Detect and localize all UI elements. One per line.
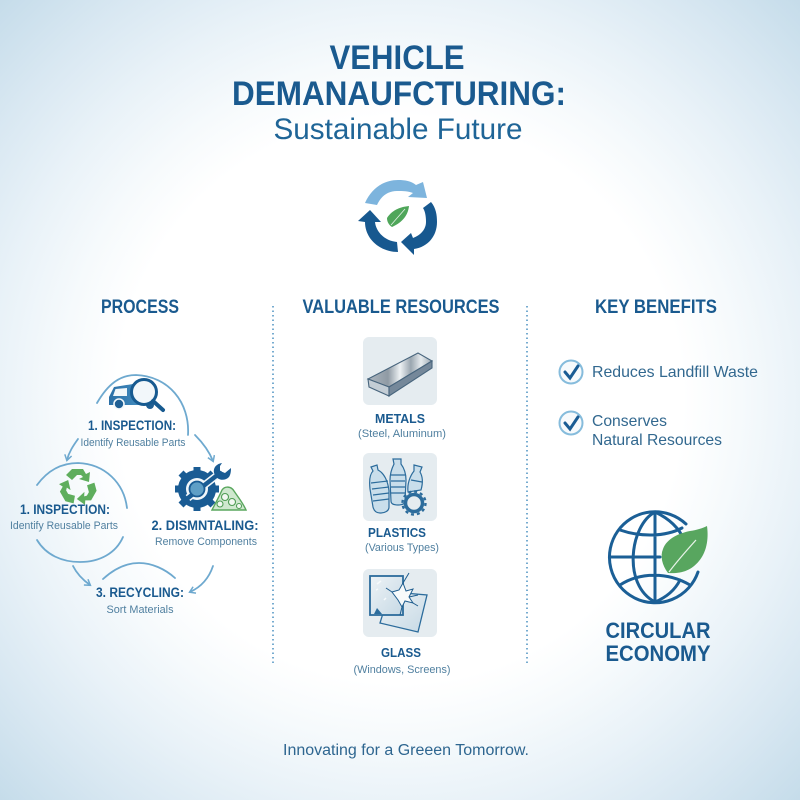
label: circular economy bbox=[606, 618, 710, 666]
label: glass: GLASS bbox=[381, 646, 421, 660]
icon: globe with leaf bbox=[609, 512, 708, 603]
cycle arcs and arrows bbox=[37, 375, 213, 592]
label: metals bbox=[358, 412, 446, 440]
benefit: conserves natural resources: Natural Resources bbox=[592, 432, 722, 449]
panel: key benefits bbox=[560, 360, 758, 666]
step label: dismantling: Remove Components bbox=[155, 536, 257, 548]
panel: valuable resources bbox=[354, 337, 450, 676]
step label: inspection top: Identify Reusable Parts bbox=[80, 437, 186, 449]
footer tagline: Innovating for a Greeen Tomorrow. bbox=[283, 742, 529, 759]
icon: vehicle with magnifier bbox=[109, 380, 163, 410]
label: glass bbox=[354, 646, 450, 676]
label: metals: (Steel, Aluminum) bbox=[358, 428, 446, 440]
icon: metal bar bbox=[363, 337, 437, 405]
icon: recycle symbol bbox=[56, 469, 100, 506]
step label: recycling: 3. RECYCLING: bbox=[96, 585, 184, 600]
heading: process: PROCESS bbox=[101, 297, 179, 318]
step label: inspection top: 1. INSPECTION: bbox=[88, 418, 176, 433]
label: plastics: PLASTICS bbox=[368, 526, 426, 540]
label: metals: METALS bbox=[375, 412, 425, 426]
step label: inspection left bbox=[10, 502, 118, 532]
label: circular economy: ECONOMY bbox=[606, 641, 710, 666]
panel: process cycle bbox=[10, 375, 258, 616]
step label: dismantling: 2. DISMNTALING: bbox=[152, 518, 258, 533]
benefit: conserves natural resources: Conserves bbox=[592, 413, 667, 430]
label: circular economy: CIRCULAR bbox=[606, 618, 710, 643]
step label: inspection top bbox=[80, 418, 186, 449]
label: plastics: (Various Types) bbox=[365, 542, 439, 554]
step label: recycling bbox=[96, 585, 184, 616]
icon: recycling arrows with leaf bbox=[358, 180, 437, 255]
step label: dismantling bbox=[152, 518, 258, 548]
title: DEMANAUFCTURING: bbox=[232, 75, 566, 113]
step label: inspection left: Identify Reusable Parts bbox=[10, 520, 118, 532]
heading: key benefits: KEY BENEFITS bbox=[595, 297, 717, 318]
label: glass: (Windows, Screens) bbox=[354, 664, 450, 676]
benefit: reduces landfill waste: Reduces Landfill Waste bbox=[592, 364, 758, 381]
benefit: conserves natural resources bbox=[560, 412, 722, 449]
title: Sustainable Future bbox=[274, 113, 522, 146]
label: plastics bbox=[365, 526, 439, 554]
step label: recycling: Sort Materials bbox=[106, 604, 174, 616]
title: VEHICLE bbox=[330, 39, 464, 77]
step label: inspection left: 1. INSPECTION: bbox=[20, 502, 110, 517]
title bbox=[232, 39, 566, 146]
icon: plastic bottles with gear bbox=[363, 453, 437, 521]
benefit: reduces landfill waste bbox=[560, 360, 758, 384]
icon: broken glass panes bbox=[363, 569, 437, 637]
heading: valuable resources: VALUABLE RESOURCES bbox=[302, 297, 500, 318]
icon: gear, wrench and material pile bbox=[175, 463, 246, 511]
